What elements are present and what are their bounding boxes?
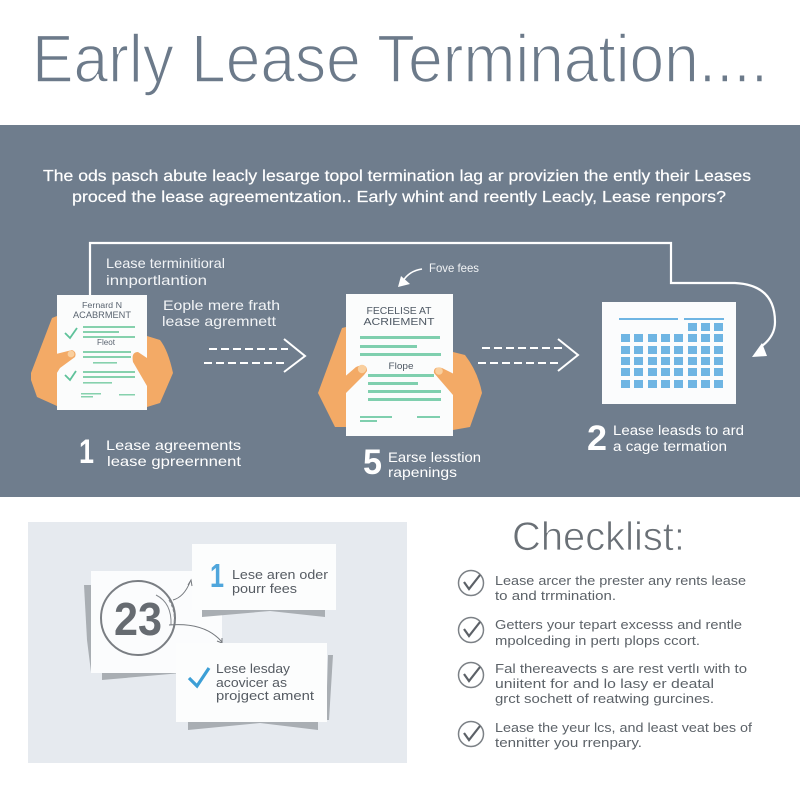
item 1: [458, 570, 746, 603]
step 1: hands holding document: Fernard N: [82, 301, 122, 310]
card: lease advice: [176, 643, 333, 730]
step 1 label: Lease agreements: [106, 437, 241, 453]
heading: checklist: Checklist:: [512, 515, 685, 559]
hands: [318, 327, 482, 430]
step 1 label: 1: [79, 433, 94, 471]
step 2: hands holding document: Flope: [388, 361, 414, 372]
card: number circle: [84, 571, 222, 680]
card: lease advice: projgect ament: [216, 688, 314, 703]
item 2: Getters your tepart excesss and rentle: [495, 617, 742, 632]
item 2: [458, 617, 742, 648]
item 1: Lease arcer the prester any rents lease: [495, 573, 746, 588]
step 1: hands holding document: ACABRMENT: [73, 310, 132, 320]
arrow: step 2 to step 3: [478, 339, 578, 371]
step 1 label: lease gpreernnent: [107, 453, 241, 469]
intro text: The ods pasch abute leacly lesarge topol termination lag ar provizien the ently their Leases: [43, 168, 751, 185]
text: people more fresh: lease agremnett: [162, 313, 276, 329]
step 1: hands holding document: Fleot: [97, 338, 116, 347]
step 3 label: Lease leasds to ard: [613, 423, 744, 438]
step 3 label: [587, 419, 744, 458]
step 3: calendar: [602, 302, 736, 404]
intro text: [43, 168, 751, 206]
intro text: proced the lease agreementzation.. Early whint and reently Leacly, Lease renpors?: [72, 189, 726, 206]
callout: free fees: Fove fees: [429, 261, 479, 275]
text: lease termination importance: innportlantion: [106, 272, 207, 288]
arrow: circle to second card: [169, 625, 222, 643]
card: lease order fees: Lese aren oder: [232, 567, 329, 582]
text: people more fresh: Eople mere frath: [163, 297, 280, 313]
arrow: circle to first card: [173, 580, 192, 600]
item 3: Fal thereavects s are rest vertlı with to: [495, 661, 747, 676]
text: lease termination importance: Lease terminitioral: [106, 255, 225, 271]
item 4: Lease the yeur lcs, and least veat bes of: [495, 720, 752, 735]
card: lease order fees: [192, 544, 336, 617]
step 2: hands holding document: FECELISE AT: [366, 305, 432, 317]
thumbs: [42, 350, 76, 392]
step 2 label: Earse lesstion: [388, 449, 481, 465]
connector arrow: top route: [90, 243, 775, 357]
item 3: uniitent for and lo lasy er deatal: [495, 676, 714, 691]
callout: free fees: [398, 261, 479, 287]
step 2: hands holding document: ACRIEMENT: [364, 316, 435, 328]
card: lease order fees: 1: [210, 557, 224, 594]
item 3: grct sochett of reatwing gurcines.: [495, 691, 714, 706]
card: number circle: 23: [114, 593, 162, 645]
item 3: [458, 661, 747, 706]
card: lease advice: acovicer as: [216, 675, 288, 690]
text: lease termination importance: [106, 255, 225, 288]
hands: [31, 316, 173, 407]
item 1: to and trrmination.: [495, 588, 616, 603]
step 1: hands holding document: [31, 295, 173, 410]
panel: example cards: [28, 522, 407, 763]
item 4: [458, 720, 752, 750]
checklist: [458, 570, 752, 750]
step 2: hands holding document: [318, 294, 482, 436]
step 3 label: 2: [587, 419, 607, 458]
step 1 label: [79, 433, 241, 471]
item 2: mpolceding in pertı plops ccort.: [495, 633, 700, 648]
item 4: tennitter you rrenpary.: [495, 735, 642, 750]
step 2 label: 5: [363, 443, 382, 482]
thumbs: [327, 365, 367, 393]
document: [346, 294, 453, 436]
panel: process band: [0, 125, 800, 497]
step 3 label: a cage termation: [613, 439, 727, 454]
step 2 label: [363, 443, 481, 482]
arrow: step 1 to step 2: [204, 339, 305, 372]
card: lease advice: Lese lesday: [216, 661, 291, 676]
card: lease order fees: pourr fees: [232, 581, 298, 596]
document: [57, 295, 147, 410]
text: people more fresh: [162, 297, 280, 329]
step 2 label: rapenings: [388, 464, 457, 480]
